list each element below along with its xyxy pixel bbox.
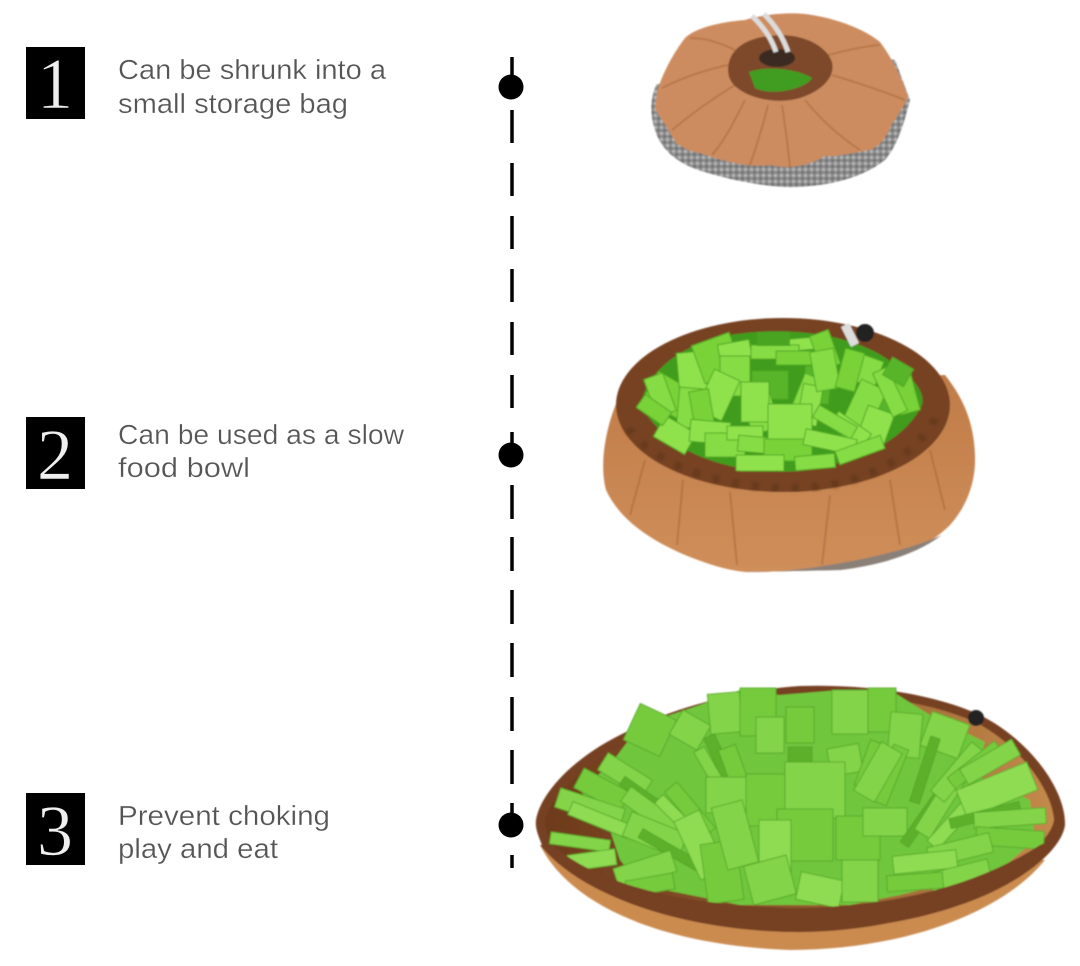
- brown gathered rim: [728, 35, 833, 101]
- photo: flat snuffle mat: [536, 686, 1065, 950]
- cord toggle: [968, 710, 984, 726]
- rim front fold: [622, 405, 945, 492]
- dark brown rim: [616, 318, 950, 492]
- green centre: [749, 69, 812, 92]
- tan pouch body: [655, 13, 908, 167]
- step 3 number badge: 3: [37, 791, 73, 871]
- base of green flaps: [580, 690, 1035, 905]
- drawstring: [752, 14, 788, 52]
- step 1 text: [118, 54, 386, 119]
- step 2 text: food bowl: [118, 452, 250, 483]
- pouch pleats: [662, 38, 905, 168]
- step 1 text: Can be shrunk into a: [118, 54, 386, 85]
- green flaps: [636, 330, 920, 471]
- step 3 text: Prevent choking: [118, 800, 330, 831]
- step 3 text: play and eat: [118, 833, 278, 864]
- photo: slow food bowl: [603, 318, 975, 572]
- tan bowl wall: [603, 375, 975, 572]
- wall pleats: [630, 450, 945, 565]
- inner floor: [545, 695, 1054, 915]
- step 3 text: [118, 800, 330, 864]
- step 1 number badge: 1: [37, 44, 73, 124]
- green flaps: [549, 688, 1046, 908]
- step 2 text: [118, 419, 405, 483]
- front rim band: [540, 838, 1058, 932]
- tan underside: [540, 845, 1045, 950]
- timeline: dashed vertical line with three dots: [498, 57, 524, 868]
- dark green interior: [642, 331, 923, 472]
- gray knit underside: [651, 40, 910, 187]
- step 3 number badge: [26, 791, 85, 871]
- brown rim: [536, 686, 1065, 931]
- step 2 text: Can be used as a slow: [118, 419, 405, 450]
- step 2 number badge: [26, 415, 85, 495]
- cord toggle: [845, 325, 855, 345]
- photo: bag shrunk into a pouch: [651, 13, 910, 187]
- step 1 text: small storage bag: [118, 88, 348, 119]
- step 2 number badge: 2: [37, 415, 73, 495]
- step 1 number badge: [26, 44, 85, 124]
